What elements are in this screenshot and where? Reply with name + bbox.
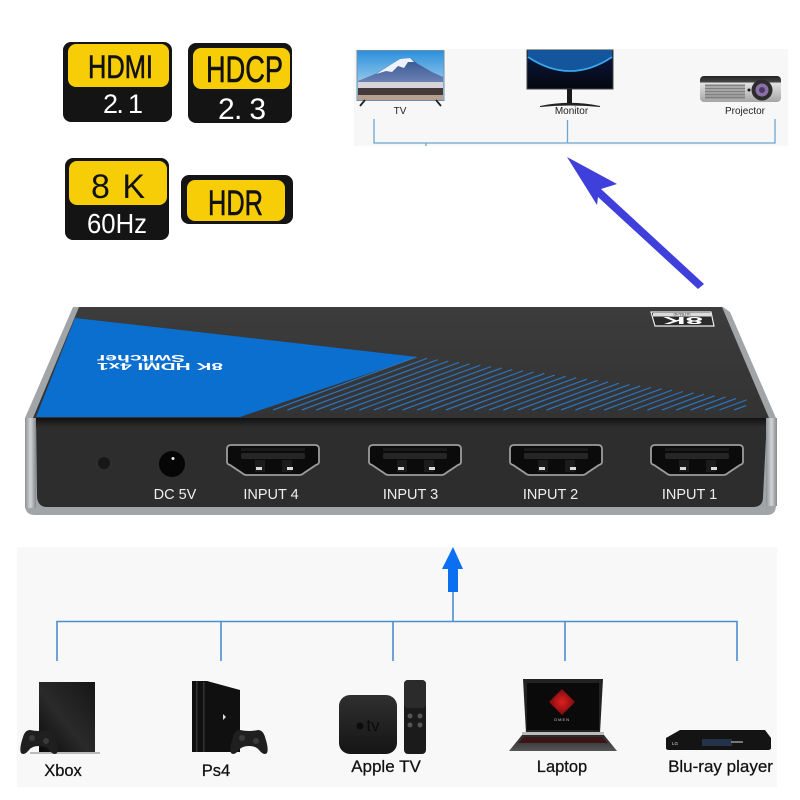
icon: Apple TV <box>339 680 426 754</box>
silver side edges <box>25 307 776 515</box>
label: Blu-ray player: Blu-ray player <box>668 757 773 776</box>
8K Ultra HD logo <box>651 312 714 326</box>
product text: 8K HDMI 4x1 Switcher: 8K HDMI 4x1 <box>96 360 223 371</box>
label: TV: TV <box>394 106 407 117</box>
badge: HDCP 2.3: HDCP <box>206 49 283 90</box>
product text: 8K HDMI 4x1 Switcher <box>96 352 223 371</box>
DC power jack <box>159 451 185 477</box>
blue panel <box>36 318 417 417</box>
badge: 8K 60Hz: 60Hz <box>87 208 147 239</box>
8K Ultra HD logo: 8K <box>661 314 703 325</box>
label: Xbox: Xbox <box>44 762 83 780</box>
badge: HDMI 2.1: 2. 1 <box>103 89 143 119</box>
badge: HDMI 2.1: HDMI <box>88 49 153 85</box>
icon: PS4 <box>192 681 268 754</box>
HDMI port: input 3 <box>369 445 461 475</box>
connector lines: inputs <box>57 590 737 661</box>
label: INPUT 2: INPUT 2 <box>523 487 578 503</box>
icon: TV <box>357 50 444 106</box>
stripe pattern <box>273 357 747 410</box>
front face <box>36 418 767 507</box>
badge: 8K 60Hz <box>65 158 169 240</box>
label: Monitor: Monitor <box>555 106 589 117</box>
badge: HDR <box>181 175 293 224</box>
product text: 8K HDMI 4x1 Switcher: Switcher <box>97 352 185 363</box>
arrow: output to displays <box>567 157 704 289</box>
top face <box>33 307 769 418</box>
icon: Blu-ray player: LG <box>672 741 679 746</box>
connector lines: outputs <box>374 119 775 146</box>
switcher device <box>25 307 777 515</box>
label: Ps4: Ps4 <box>202 762 230 780</box>
badge: 8K 60Hz: 8 K <box>91 168 145 206</box>
icon: Monitor <box>527 50 613 106</box>
HDMI port: input 2 <box>510 445 602 475</box>
label: INPUT 4: INPUT 4 <box>243 487 299 503</box>
icon: Projector <box>700 76 781 102</box>
badge: HDMI 2.1 <box>63 42 172 122</box>
label: Laptop: Laptop <box>537 758 587 776</box>
badge: HDCP 2.3 <box>188 43 292 126</box>
panel: input sources <box>17 547 777 787</box>
label: INPUT 3: INPUT 3 <box>383 487 438 503</box>
panel: output displays <box>354 49 788 146</box>
icon: Laptop: OMEN <box>554 717 570 722</box>
HDMI port: input 1 <box>651 445 743 475</box>
label: DC 5V: DC 5V <box>154 487 197 503</box>
icon: Apple TV: tv <box>366 716 380 735</box>
badge: HDCP 2.3: 2. 3 <box>218 93 266 126</box>
label: INPUT 1: INPUT 1 <box>662 487 717 503</box>
label: Projector: Projector <box>725 106 766 117</box>
icon: Laptop <box>509 679 617 751</box>
HDMI port: input 4 <box>227 445 319 475</box>
indicator LED <box>98 457 110 469</box>
8K Ultra HD logo: ULTRA HD <box>673 312 691 316</box>
label: Apple TV: Apple TV <box>351 757 421 776</box>
arrow: sources to switcher <box>442 547 463 592</box>
icon: Blu-ray player <box>666 730 771 750</box>
icon: Xbox <box>20 682 100 754</box>
badge: HDR: HDR <box>208 184 263 223</box>
